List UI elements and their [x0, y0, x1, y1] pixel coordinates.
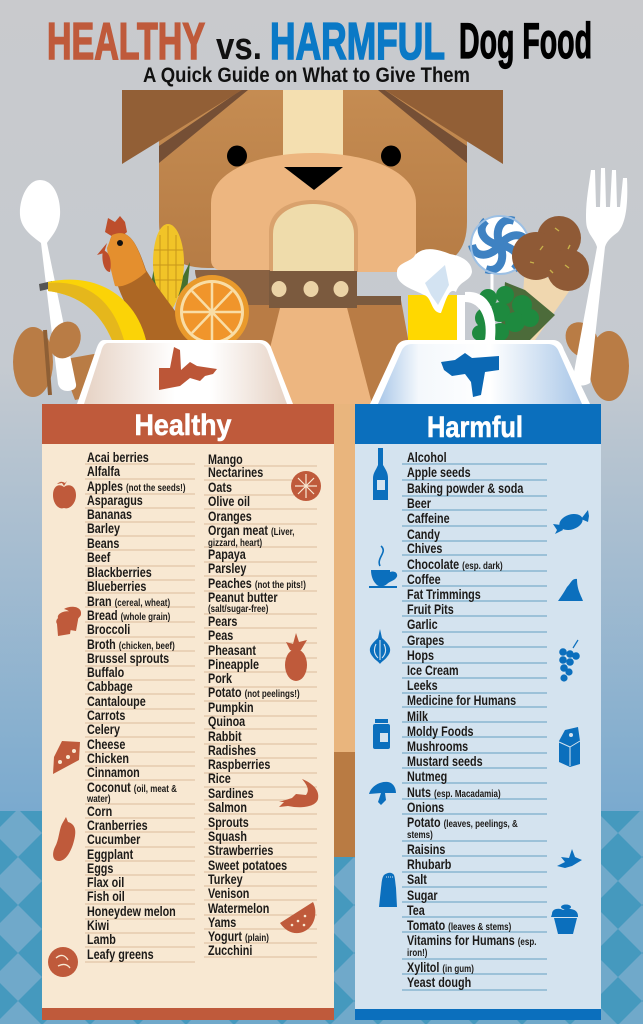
healthy list column 1: Cucumber	[87, 832, 141, 847]
spoon	[20, 180, 76, 391]
footer bar	[42, 1008, 334, 1020]
healthy list column 2: Organ meat (Liver,	[208, 523, 295, 538]
harmful list: Baking powder & soda	[407, 481, 524, 496]
healthy list column 2	[204, 452, 317, 958]
eyes	[227, 146, 401, 166]
healthy list column 2: Venison	[208, 886, 249, 901]
healthy list column 2: Parsley	[208, 561, 247, 576]
healthy list column 1: Asparagus	[87, 493, 143, 508]
spoon band	[39, 281, 53, 291]
icon: healthy dog hand shadow	[159, 347, 217, 390]
icon: chocolate kiss	[558, 579, 583, 601]
panel: harmful	[355, 404, 601, 1020]
harmful list: iron!)	[407, 947, 427, 958]
healthy list column 1: Lamb	[87, 932, 116, 947]
healthy list column 1: Cabbage	[87, 679, 133, 694]
title: HEALTHY	[47, 13, 205, 71]
harmful list: Yeast dough	[407, 975, 471, 990]
harmful list: Leeks	[407, 678, 438, 693]
fork	[572, 168, 627, 386]
icon: cheese	[53, 741, 80, 774]
harmful list: Nutmeg	[407, 769, 447, 784]
healthy list column 1: Blackberries	[87, 565, 152, 580]
left bowl	[77, 340, 293, 404]
harmful list: Rhubarb	[407, 857, 451, 872]
healthy list column 2: Mango	[208, 452, 243, 467]
dog body	[215, 300, 420, 857]
icon: bottle	[373, 448, 388, 500]
harmful list: Mustard seeds	[407, 754, 483, 769]
healthy list column 2: Sweet potatoes	[208, 858, 287, 873]
healthy list column 2: Nectarines	[208, 465, 263, 480]
healthy list column 1: Beans	[87, 536, 120, 551]
healthy list column 1	[85, 450, 195, 962]
collar	[195, 270, 401, 308]
harmful list: Caffeine	[407, 511, 450, 526]
icon: rhubarb leaves	[557, 849, 582, 868]
healthy list column 2: Papaya	[208, 547, 246, 562]
rooster	[97, 216, 196, 340]
banana	[48, 280, 146, 340]
healthy list column 1: Eggplant	[87, 847, 133, 862]
healthy list column 1: Broccoli	[87, 622, 130, 637]
healthy list column 2: Peaches (not the pits!)	[208, 576, 306, 591]
icon: watermelon	[280, 902, 315, 933]
icon: coffee cup	[369, 546, 397, 588]
healthy list column 1: water)	[86, 793, 111, 804]
icon: leafy greens	[48, 947, 78, 977]
heading: Harmful: Harmful	[427, 411, 523, 444]
healthy list column 2: Rabbit	[208, 729, 242, 744]
harmful list: Sugar	[407, 888, 438, 903]
harmful list: Chives	[407, 541, 443, 556]
harmful list: Ice Cream	[407, 663, 459, 678]
icon: salmon	[279, 779, 318, 807]
healthy list column 2: (salt/sugar-free)	[208, 603, 268, 614]
nose	[284, 167, 343, 190]
healthy list column 2: Pheasant	[208, 643, 256, 658]
harmful list: stems)	[407, 829, 433, 840]
icon: onion	[370, 629, 390, 664]
panel: healthy	[42, 404, 334, 1020]
healthy list column 1: Broth (chicken, beef)	[87, 637, 175, 652]
dog ears	[122, 90, 503, 164]
right bowl	[370, 340, 590, 404]
healthy list column 1: Chicken	[87, 751, 129, 766]
heading bar	[355, 404, 601, 444]
healthy list column 1: Coconut (oil, meat &	[87, 780, 177, 795]
healthy list column 1: Blueberries	[87, 579, 147, 594]
healthy list column 1: Cantaloupe	[87, 694, 146, 709]
healthy list column 1: Carrots	[87, 708, 126, 723]
icon: eggplant	[53, 817, 75, 861]
healthy list column 2: Raspberries	[208, 757, 271, 772]
harmful list: Vitamins for Humans (esp.	[407, 933, 536, 948]
healthy list column 1: Bran (cereal, wheat)	[87, 594, 170, 609]
left arm and paw	[13, 327, 105, 400]
healthy list column 1: Cheese	[87, 737, 126, 752]
harmful list: Onions	[407, 800, 444, 815]
healthy list column 2: Potato (not peelings!)	[208, 685, 300, 700]
icon: orange half	[291, 471, 321, 501]
healthy list column 1: Cranberries	[87, 818, 148, 833]
healthy list column 2: Pineapple	[208, 657, 259, 672]
healthy list column 2: Strawberries	[208, 843, 274, 858]
subtitle: A Quick Guide on What to Give Them	[143, 64, 470, 87]
healthy list column 1: Eggs	[87, 861, 114, 876]
healthy list column 1: Beef	[87, 550, 111, 565]
healthy list column 1: Bread (whole grain)	[87, 608, 170, 623]
icon: mushroom	[369, 782, 396, 805]
harmful list: Hops	[407, 648, 434, 663]
healthy list column 1: Kiwi	[87, 918, 109, 933]
muzzle	[211, 153, 416, 272]
icon: salt shaker	[379, 873, 397, 907]
healthy list column 1: Apples (not the seeds!)	[87, 479, 186, 494]
healthy list column 1: Honeydew melon	[87, 904, 176, 919]
healthy list column 2: Pork	[208, 671, 232, 686]
harmful list: Salt	[407, 872, 427, 887]
harmful list: Milk	[407, 709, 428, 724]
corn	[150, 224, 190, 312]
harmful list: Apple seeds	[407, 465, 471, 480]
right food	[397, 216, 589, 341]
healthy list column 2: Oranges	[208, 509, 252, 524]
harmful list: Candy	[407, 527, 440, 542]
title: HARMFUL	[270, 13, 445, 71]
harmful list: Potato (leaves, peelings, &	[407, 815, 518, 830]
healthy list column 2: Peanut butter	[208, 590, 278, 605]
mouth	[269, 200, 358, 272]
healthy list column 1: Cinnamon	[87, 765, 140, 780]
healthy list column 1: Barley	[87, 521, 120, 536]
harmful list	[402, 450, 547, 990]
icon: harmful dog thumbs-down	[441, 353, 499, 397]
harmful list: Chocolate (esp. dark)	[407, 557, 503, 572]
healthy list column 1: Celery	[87, 722, 120, 737]
harmful list: Garlic	[407, 617, 438, 632]
healthy list column 2: Turkey	[208, 872, 243, 887]
healthy list column 2: Rice	[208, 771, 231, 786]
healthy list column 2: gizzard, heart)	[208, 537, 262, 548]
grapes	[472, 282, 555, 341]
harmful list: Xylitol (in gum)	[407, 960, 474, 975]
harmful list: Beer	[407, 496, 431, 511]
healthy list column 2: Squash	[208, 829, 247, 844]
left food	[48, 216, 249, 349]
healthy list column 2: Peas	[208, 628, 233, 643]
healthy list column 1: Buffalo	[87, 665, 124, 680]
healthy list column 2: Yams	[208, 915, 236, 930]
healthy list column 2: Watermelon	[208, 901, 269, 916]
harmful list: Tomato (leaves & stems)	[407, 918, 511, 933]
harmful list: Raisins	[407, 842, 446, 857]
title: vs.	[216, 26, 262, 68]
healthy list column 1: Brussel sprouts	[87, 651, 169, 666]
title	[47, 13, 592, 71]
heading: Healthy: Healthy	[134, 409, 232, 442]
icon: bread	[56, 607, 81, 636]
healthy list column 2: Salmon	[208, 800, 247, 815]
forehead stripe	[283, 90, 343, 160]
healthy list column 1: Corn	[87, 804, 112, 819]
harmful list: Grapes	[407, 633, 444, 648]
healthy list column 1: Leafy greens	[87, 947, 154, 962]
harmful list: Medicine for Humans	[407, 693, 516, 708]
illustration: dog	[122, 90, 503, 857]
healthy list column 2: Olive oil	[208, 494, 250, 509]
healthy list column 1: Fish oil	[87, 889, 125, 904]
harmful list: Fat Trimmings	[407, 587, 481, 602]
harmful list: Nuts (esp. Macadamia)	[407, 785, 501, 800]
icon: pineapple	[285, 633, 307, 681]
healthy list column 1: Acai berries	[87, 450, 149, 465]
healthy list column 2: Yogurt (plain)	[208, 929, 269, 944]
harmful list: Coffee	[407, 572, 441, 587]
healthy list column 2: Pumpkin	[208, 700, 254, 715]
panel background	[355, 404, 601, 1020]
icon: medicine jar	[373, 719, 390, 749]
healthy list column 2: Radishes	[208, 743, 256, 758]
healthy list column 2: Oats	[208, 480, 232, 495]
panel background	[42, 404, 334, 1020]
healthy list column 1: Bananas	[87, 507, 132, 522]
healthy list column 2: Quinoa	[208, 714, 245, 729]
harmful list: Alcohol	[407, 450, 447, 465]
footer bar	[355, 1009, 601, 1020]
heading bar	[42, 404, 334, 444]
orange slice	[175, 275, 249, 349]
healthy list column 2: Sardines	[208, 786, 254, 801]
icon: cupcake bowl	[551, 904, 578, 934]
icon: candy	[553, 510, 589, 534]
healthy list column 2: Pears	[208, 614, 238, 629]
harmful list: Mushrooms	[407, 739, 468, 754]
lollipop	[471, 216, 529, 300]
healthy list column 2: Zucchini	[208, 943, 252, 958]
dog head	[159, 90, 467, 268]
healthy list column 2: Sprouts	[208, 815, 249, 830]
left hand	[43, 316, 87, 364]
beer mug	[397, 249, 496, 341]
icon: apple	[53, 481, 76, 508]
healthy list column 1: Alfalfa	[87, 464, 120, 479]
harmful list: Moldy Foods	[407, 724, 474, 739]
ice cream	[512, 216, 589, 340]
ear shadows	[159, 90, 467, 163]
harmful list: Fruit Pits	[407, 602, 454, 617]
icon: grapes	[559, 640, 580, 682]
icon: milk carton	[559, 727, 580, 767]
healthy list column 1: Flax oil	[87, 875, 124, 890]
right paw	[559, 316, 629, 401]
harmful list: Tea	[407, 903, 425, 918]
